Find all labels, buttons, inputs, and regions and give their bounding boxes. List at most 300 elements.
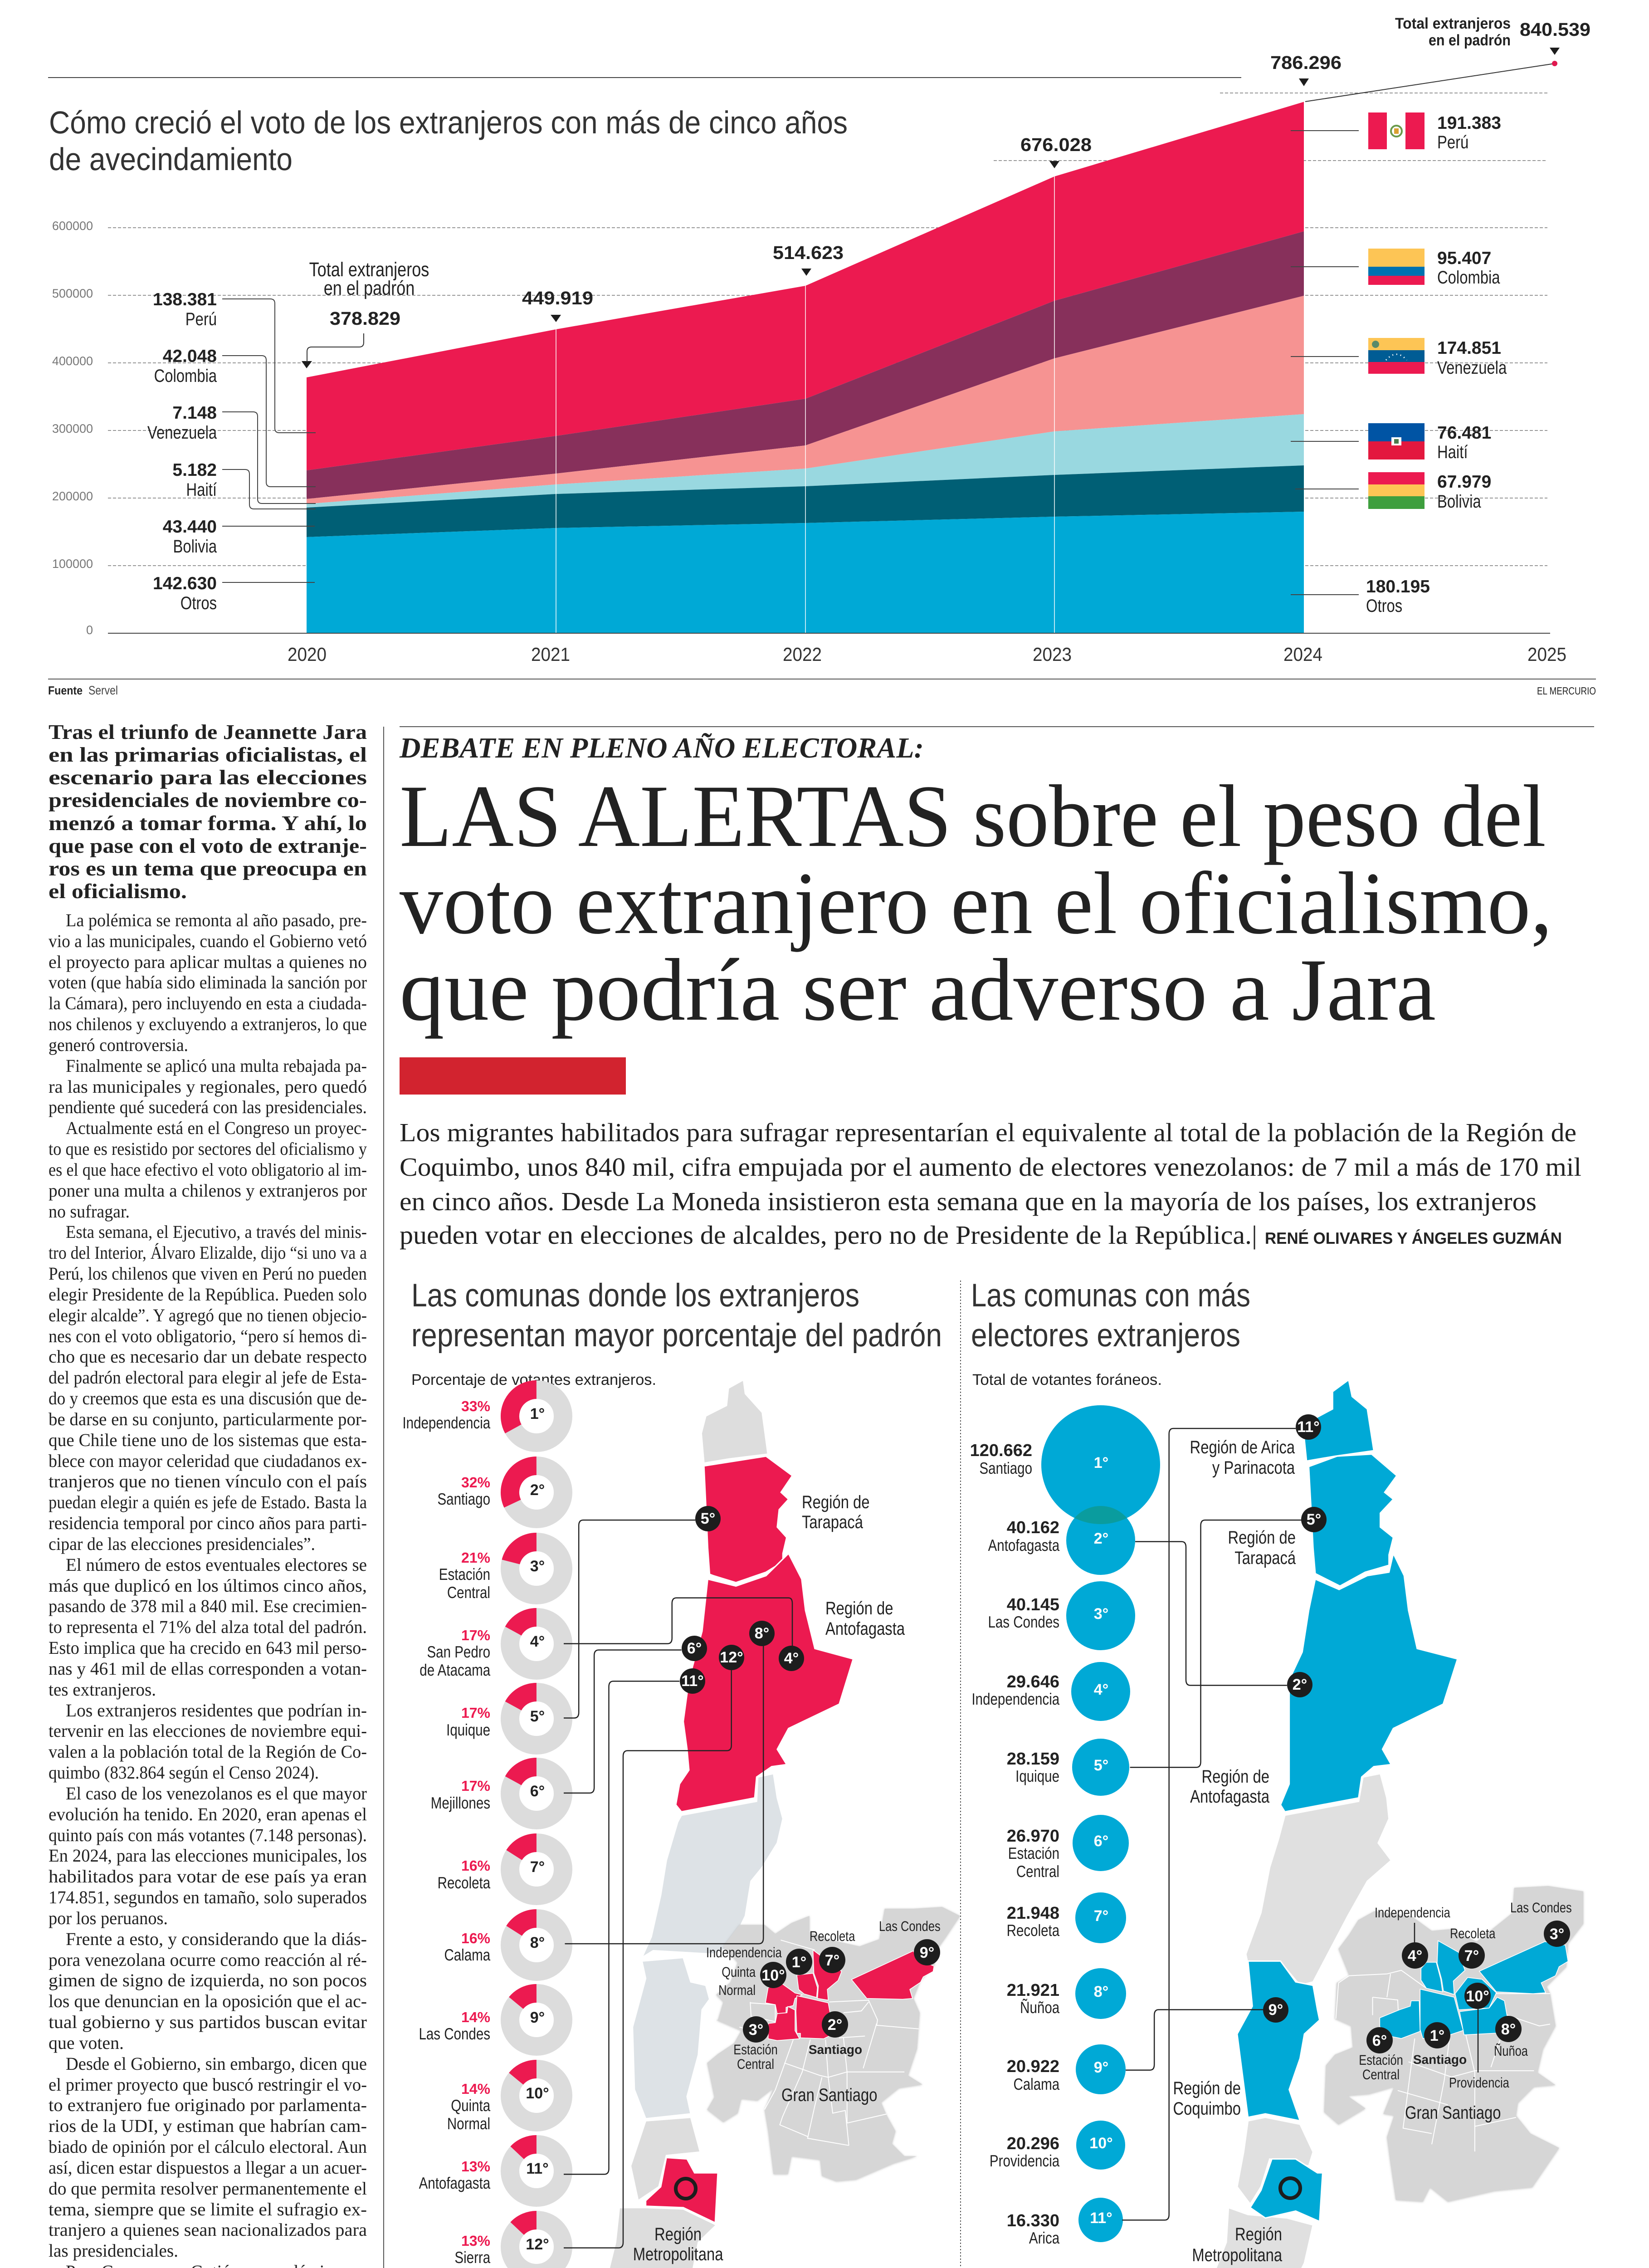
bubble labels: Independencia — [971, 1690, 1060, 1708]
map labels left: Región de — [825, 1598, 893, 1618]
commune labels: 21% — [461, 1549, 490, 1566]
main headline: voto extranjero en el oficialismo, — [400, 854, 1552, 953]
intro paragraph: presidenciales de noviembre co- — [49, 788, 367, 811]
donuts: percentage by commune: 5° — [530, 1708, 545, 1725]
panel heading: Total de votantes foráneos. — [972, 1371, 1162, 1388]
body text: left column: cho que es necesario dar un debate respecto — [49, 1346, 367, 1367]
main headline: que podría ser adverso a Jara — [400, 941, 1436, 1039]
bubble ranks: 8° — [1094, 1983, 1108, 2000]
map labels left: Región — [654, 2224, 702, 2244]
body text: left column: tervenir en las elecciones de noviembre equi- — [49, 1721, 367, 1741]
map labels left: Antofagasta — [825, 1619, 905, 1639]
map markers left: 3° — [749, 2021, 763, 2038]
commune labels: Quinta — [451, 2096, 491, 2115]
body text: left column: nos chilenos y excluyendo a extranjeros, lo que — [49, 1014, 367, 1034]
icon: flag Peru — [1368, 112, 1425, 149]
right legend 2024 with flags — [1291, 112, 1507, 616]
bubble ranks — [1089, 1454, 1113, 2227]
bubble labels: 21.921 — [1007, 1981, 1059, 2000]
body text: left column: 174.851, segundos en tamaño, solo superados — [49, 1887, 367, 1907]
map of Chile, blue regions — [1211, 1380, 1458, 2268]
body text: left column: Finalmente se aplicó una multa rebajada pa- — [66, 1056, 367, 1076]
map markers left: 1° — [792, 1954, 806, 1971]
panel heading: Porcentaje de votantes extranjeros. — [411, 1371, 656, 1388]
map labels left: Estación — [733, 2042, 778, 2058]
commune labels: Independencia — [402, 1413, 491, 1432]
body text: left column: tranjero a quienes sean nacionalizados para — [49, 2219, 367, 2240]
map markers left: 12° — [720, 1649, 743, 1666]
body text: left column: El número de estos eventuales electores se — [66, 1554, 367, 1575]
map markers right: 10° — [1466, 1988, 1489, 2005]
commune labels: 14% — [461, 2081, 490, 2097]
bubble ranks: 10° — [1089, 2135, 1113, 2152]
bubble labels: 28.159 — [1007, 1750, 1059, 1769]
body text: left column: que Chile tiene uno de los sistemas que esta- — [49, 1430, 367, 1450]
intro paragraph: escenario para las elecciones — [49, 766, 367, 789]
map labels right: Coquimbo — [1173, 2099, 1241, 2119]
left legend 2020: 42.048 — [163, 347, 217, 366]
bubble labels: 120.662 — [970, 1441, 1032, 1460]
left legend 2020: 142.630 — [153, 574, 217, 593]
y axis labels: 100000 — [52, 557, 93, 571]
bubble labels: 40.145 — [1007, 1595, 1059, 1614]
leader lines — [1122, 1428, 1302, 2220]
body text: left column: habilitados para votar de ese país ya eran — [49, 1866, 367, 1887]
left legend 2020 — [147, 290, 316, 613]
bubble ranks: 4° — [1094, 1681, 1108, 1698]
body text: left column: nas y 461 mil de ellas corresponden a votan- — [49, 1658, 367, 1679]
y axis labels: 500000 — [52, 287, 93, 300]
kicker: DEBATE EN PLENO AÑO ELECTORAL: — [399, 732, 924, 764]
map markers left — [680, 1506, 940, 2043]
left legend 2020: Perú — [185, 309, 217, 329]
body text: left column: quimbo (832.864 según el Censo 2024). — [49, 1762, 319, 1783]
body text: left column: evolución ha tenido. En 2020, eran apenas el — [49, 1804, 367, 1824]
y axis labels: 400000 — [52, 354, 93, 368]
map markers right: 6° — [1372, 2032, 1387, 2049]
total values: 786.296 — [1270, 52, 1342, 73]
body text: left column: la Cámara), pero incluyendo en esta a ciudada- — [49, 993, 367, 1013]
map labels right: Estación — [1359, 2052, 1403, 2068]
x axis years: 2021 — [531, 644, 570, 665]
intro paragraph: menzó a tomar forma. Y ahí, lo — [49, 811, 367, 835]
deck: pueden votar en elecciones de alcaldes, pero no de Presidente de la República.| — [400, 1220, 1257, 1250]
donuts: percentage by commune: 6° — [530, 1783, 545, 1800]
total values: 449.919 — [522, 288, 593, 308]
intro paragraph: el oficialismo. — [49, 880, 187, 903]
map labels left: Central — [737, 2056, 774, 2072]
body text: left column: Los extranjeros residentes que podrían in- — [66, 1700, 367, 1721]
bubble labels: 20.296 — [1007, 2134, 1059, 2153]
icon: Santiago ring — [676, 2179, 696, 2199]
map markers right — [1263, 1414, 1570, 2053]
body text: left column: be darse en su conjunto, particularmente por- — [49, 1409, 367, 1429]
body text: left column: que voten. — [49, 2033, 124, 2053]
body text: left column: Actualmente está en el Congreso un proyec- — [66, 1118, 367, 1138]
body text: left column: pasando de 378 mil a 840 mil. Ese crecimien- — [49, 1596, 367, 1616]
map markers right: 8° — [1501, 2021, 1516, 2038]
map labels left — [633, 1492, 941, 2264]
bubble ranks: 6° — [1094, 1833, 1108, 1850]
commune labels: Estación — [439, 1565, 490, 1584]
map markers right: 7° — [1464, 1947, 1479, 1965]
commune labels: 16% — [461, 1930, 490, 1946]
commune labels: 17% — [461, 1778, 490, 1794]
map labels right: Gran Santiago — [1405, 2103, 1501, 2123]
commune labels: de Atacama — [420, 1661, 491, 1679]
right legend 2024 with flags: Venezuela — [1437, 358, 1507, 378]
total values — [330, 19, 1590, 329]
body text: left column: La polémica se remonta al año pasado, pre- — [66, 910, 367, 930]
body text: left column: elegir alcalde”. Y agregó que no tienen objecio- — [49, 1305, 367, 1325]
right legend 2024 with flags: Haití — [1437, 442, 1468, 462]
right legend 2024 with flags: 95.407 — [1437, 249, 1491, 268]
body text: left column: tual gobierno y sus partidos buscan evitar — [49, 2012, 367, 2032]
x axis years: 2024 — [1283, 644, 1322, 665]
left legend 2020: Haití — [186, 480, 217, 500]
body text: left column: tro del Interior, Álvaro Elizalde, dijo “si uno va a — [49, 1242, 367, 1263]
caption: total 2020 — [307, 259, 429, 362]
body text: left column: Esta semana, el Ejecutivo, a través del minis- — [66, 1222, 367, 1242]
body text: left column: así, dicen estar dispuestos a llegar a un acuer- — [49, 2157, 367, 2178]
left legend 2020: Bolivia — [173, 537, 217, 557]
caption: total 2025: en el padrón — [1429, 32, 1511, 49]
x axis years: 2023 — [1033, 644, 1072, 665]
commune labels: Iquique — [446, 1721, 490, 1739]
map markers left: 8° — [755, 1625, 769, 1642]
body text: left column: En 2024, para las elecciones municipales, los — [49, 1845, 367, 1866]
body text: left column: pendiente qué sucederá con las presidenciales. — [49, 1097, 367, 1117]
leader lines — [564, 1520, 792, 2248]
panel: area chart of foreign voters — [48, 15, 1596, 697]
bubble labels: Las Condes — [988, 1613, 1059, 1631]
intro paragraph: Tras el triunfo de Jeannette Jara — [49, 720, 367, 743]
body text: left column: blece con mayor celeridad que ciudadanos ex- — [49, 1451, 367, 1471]
bubble ranks: 2° — [1094, 1530, 1108, 1547]
map labels right: Antofagasta — [1190, 1787, 1270, 1807]
body text: left column: gimen de signo de izquierda, no son pocos — [49, 1970, 367, 1990]
deck: Los migrantes habilitados para sufragar representarían el equivalente al total de la población de la Región de — [400, 1118, 1576, 1147]
chart source — [48, 684, 118, 697]
donuts: percentage by commune: 4° — [530, 1633, 545, 1650]
deck — [400, 1118, 1581, 1250]
commune labels: Central — [447, 1583, 490, 1602]
bubble ranks: 3° — [1094, 1605, 1108, 1623]
total values: 514.623 — [773, 242, 844, 263]
right legend 2024 with flags: Otros — [1366, 596, 1402, 616]
bubble labels: 29.646 — [1007, 1672, 1059, 1691]
donuts: percentage by commune: 12° — [526, 2236, 549, 2253]
y axis labels: 0 — [86, 623, 93, 637]
map of northern Chile, pink regions — [606, 1380, 853, 2268]
map markers right: 3° — [1550, 1926, 1564, 1943]
bubble labels: Calama — [1013, 2075, 1060, 2093]
bubble labels: Estación — [1008, 1844, 1059, 1862]
panel heading: electores extranjeros — [971, 1317, 1240, 1354]
body text: left column: quinto país con más votantes (7.148 personas). — [49, 1825, 367, 1845]
body text: left column: rios de la UDI, y estiman que habrían cam- — [49, 2116, 367, 2136]
map labels right: y Parinacota — [1212, 1458, 1295, 1478]
commune labels: 33% — [461, 1398, 490, 1414]
y axis labels: 600000 — [52, 219, 93, 233]
right legend 2024 with flags: 174.851 — [1437, 338, 1501, 358]
map markers left: 5° — [701, 1510, 715, 1527]
map labels left: Tarapacá — [802, 1512, 864, 1532]
right legend 2024 with flags: 67.979 — [1437, 472, 1491, 492]
map labels right: Región — [1235, 2224, 1282, 2244]
commune labels: 16% — [461, 1857, 490, 1874]
donuts: percentage by commune: 1° — [530, 1405, 545, 1422]
commune labels: Recoleta — [438, 1873, 491, 1892]
commune labels: 14% — [461, 2009, 490, 2025]
map labels right: Recoleta — [1450, 1926, 1496, 1941]
body text: left column: biado de opinión por el cálculo electoral. Aun — [49, 2136, 367, 2157]
chart title: Cómo creció el voto de los extranjeros con más de cinco años — [49, 105, 848, 140]
icon: flag Bolivia — [1368, 472, 1425, 509]
body text: left column: vio a las municipales, cuando el Gobierno vetó — [49, 931, 367, 951]
chart source: Fuente — [48, 684, 83, 697]
body text: left column: residencia temporal por cinco años para parti- — [49, 1513, 367, 1533]
body text: left column: el primer proyecto que buscó restringir el vo- — [49, 2074, 367, 2095]
map labels right: Región de Arica — [1190, 1437, 1295, 1457]
intro paragraph — [49, 720, 367, 903]
y axis labels: 300000 — [52, 422, 93, 435]
projection line to 2025 — [1305, 61, 1557, 102]
map labels right: Ñuñoa — [1494, 2043, 1528, 2059]
icon: flag Colombia — [1368, 249, 1425, 285]
map labels right: Región de — [1173, 2078, 1241, 2098]
donuts: percentage by commune: 11° — [526, 2160, 549, 2177]
map markers left: 4° — [784, 1650, 799, 1667]
caption: total 2020: Total extranjeros — [309, 259, 429, 281]
body text: left column: nes con el voto obligatorio, “pero sí hemos di- — [49, 1326, 367, 1346]
bubble ranks: 1° — [1094, 1454, 1108, 1471]
map markers left: 2° — [828, 2016, 842, 2033]
body text: left column: del padrón electoral para elegir al jefe de Esta- — [49, 1367, 367, 1388]
commune labels: Santiago — [437, 1490, 490, 1508]
left legend 2020: 5.182 — [172, 460, 217, 480]
total markers — [302, 48, 1560, 368]
body text: left column: poner una multa a chilenos y extranjeros por — [49, 1180, 367, 1201]
bubble labels: 20.922 — [1007, 2057, 1059, 2076]
map markers right: 4° — [1408, 1947, 1422, 1965]
body text: left column: El caso de los venezolanos es el que mayor — [66, 1783, 367, 1804]
deck: RENÉ OLIVARES Y ÁNGELES GUZMÁN — [1265, 1229, 1562, 1247]
body text: left column: Esto implica que ha crecido en 643 mil perso- — [49, 1637, 367, 1658]
map labels left: Recoleta — [810, 1928, 855, 1944]
inset map: Gran Santiago — [1324, 1886, 1583, 2202]
body text: left column: to representa el 71% del alza total del padrón. — [49, 1617, 367, 1637]
body text: left column: Perú, los chilenos que viven en Perú no pueden — [49, 1263, 367, 1284]
body text: left column: cipar de las elecciones presidenciales”. — [49, 1534, 315, 1554]
body text: left column: generó controversia. — [49, 1035, 188, 1055]
body text: left column: ra las municipales y regionales, pero quedó — [49, 1076, 367, 1097]
panel heading: representan mayor porcentaje del padrón — [411, 1317, 942, 1354]
body text: left column: to que es resistido por sectores del oficialismo y — [49, 1139, 367, 1159]
right legend 2024 with flags: 76.481 — [1437, 423, 1491, 443]
body text: left column — [49, 910, 367, 2268]
donuts: percentage by commune: 10° — [526, 2085, 549, 2102]
chart source: Servel — [88, 684, 118, 697]
map labels right — [1173, 1437, 1572, 2265]
map labels left: Metropolitana — [633, 2244, 723, 2264]
x axis years: 2022 — [783, 644, 822, 665]
commune labels: San Pedro — [427, 1642, 490, 1661]
bubble labels: 26.970 — [1007, 1827, 1059, 1846]
body text: left column: Desde el Gobierno, sin embargo, dicen que — [66, 2053, 367, 2074]
body text: left column: elegir Presidente de la República. Pueden solo — [49, 1284, 367, 1305]
panel: communes with most foreign voters — [970, 1277, 1583, 2268]
x axis years — [288, 644, 1566, 665]
map labels right: Independencia — [1375, 1905, 1450, 1921]
deck: Coquimbo, unos 840 mil, cifra empujada por el aumento de electores venezolanos: de 7 mil a más de 170 mil — [400, 1152, 1581, 1182]
total values: 840.539 — [1520, 19, 1590, 40]
map labels right: Región de — [1228, 1528, 1296, 1548]
map labels right: Metropolitana — [1192, 2245, 1283, 2265]
body text: left column: los que denuncian en la oposición que el ac- — [49, 1991, 367, 2011]
map markers left: 10° — [761, 1967, 785, 1984]
left legend 2020: Colombia — [154, 366, 217, 386]
body text: left column: por los peruanos. — [49, 1908, 168, 1928]
x axis years: 2020 — [288, 644, 327, 665]
body text: left column: voten (que había sido eliminada la sanción por — [49, 972, 367, 992]
body text: left column: valen a la población total de la Región de Co- — [49, 1741, 367, 1762]
red block — [400, 1057, 626, 1095]
x axis years: 2025 — [1527, 644, 1566, 665]
body text: left column: tema, siempre que se limite el sufragio ex- — [49, 2199, 367, 2219]
map labels left: Región de — [802, 1492, 870, 1512]
body text: left column: do que permita resolver permanentemente el — [49, 2178, 367, 2199]
body text: left column: to extranjero fue originado por parlamenta- — [49, 2095, 367, 2115]
commune labels: Antofagasta — [419, 2174, 491, 2192]
body text: left column: tranjeros que no tienen vínculo con el país — [49, 1471, 367, 1491]
panel: communes with highest foreign share — [402, 1277, 960, 2268]
body text: left column: es el que hace efectivo el voto obligatorio al im- — [49, 1159, 367, 1180]
intro paragraph: que pase con el voto de extranje- — [49, 834, 367, 857]
commune labels — [402, 1398, 491, 2268]
body text: left column: puedan elegir a quién es jefe de Estado. Basta la — [49, 1492, 367, 1512]
y axis labels: 200000 — [52, 489, 93, 503]
right legend 2024 with flags: 191.383 — [1437, 113, 1501, 133]
intro paragraph: en las primarias oficialistas, el — [49, 743, 367, 766]
commune labels: 32% — [461, 1474, 490, 1491]
total values: 378.829 — [330, 308, 400, 329]
donuts: percentage by commune: 7° — [530, 1858, 545, 1876]
inset map: Gran Santiago — [707, 1907, 960, 2181]
map markers right: 1° — [1430, 2027, 1444, 2044]
main headline: LAS ALERTAS sobre el peso del — [400, 767, 1546, 865]
right legend 2024 with flags: Colombia — [1437, 268, 1500, 288]
body text: left column: las presidenciales. — [49, 2240, 178, 2261]
body text: left column: tes extranjeros. — [49, 1679, 156, 1700]
bubble labels: Central — [1016, 1862, 1059, 1881]
bubble labels: Ñuñoa — [1020, 1998, 1060, 2017]
bubble labels: Iquique — [1015, 1767, 1059, 1785]
right legend 2024 with flags: Bolivia — [1437, 492, 1481, 512]
map labels right: Tarapacá — [1234, 1548, 1296, 1568]
commune labels: Sierra — [454, 2248, 491, 2267]
map markers right: 9° — [1268, 2001, 1283, 2019]
map labels right: Región de — [1201, 1767, 1269, 1787]
commune labels: Mejillones — [431, 1794, 490, 1812]
map labels left: Santiago — [809, 2043, 862, 2057]
bubble ranks: 11° — [1090, 2209, 1112, 2227]
commune labels: Normal — [447, 2114, 490, 2133]
map markers right: 5° — [1307, 1511, 1321, 1528]
caption: total 2020: en el padrón — [324, 277, 415, 299]
bubble labels: Providencia — [990, 2151, 1060, 2170]
y axis labels — [52, 219, 93, 637]
credit: EL MERCURIO — [1537, 685, 1596, 697]
bubbles: foreign voters by commune — [1041, 1405, 1160, 2242]
deck: en cinco años. Desde La Moneda insistieron esta semana que en la mayoría de los países, los extranjeros — [400, 1187, 1537, 1216]
panel heading: Las comunas con más — [971, 1277, 1250, 1314]
donuts: percentage by commune: 2° — [530, 1481, 545, 1499]
map markers right: 11° — [1297, 1418, 1320, 1436]
icon: flag Haiti — [1368, 423, 1425, 459]
stacked areas — [307, 102, 1304, 633]
main headline — [400, 767, 1552, 1039]
intro paragraph: ros es un tema que preocupa en — [49, 857, 367, 880]
left legend 2020: Venezuela — [147, 423, 217, 443]
caption: total 2025 — [1395, 15, 1511, 49]
bubble labels: Santiago — [979, 1459, 1032, 1477]
map labels right: Central — [1362, 2067, 1400, 2082]
donuts: percentage by commune: 3° — [530, 1558, 545, 1575]
bubble ranks: 7° — [1094, 1907, 1108, 1925]
body text: left column: do y creemos que esta es una discusión que de- — [49, 1388, 367, 1408]
map markers left: 6° — [687, 1640, 702, 1657]
icon: flag Venezuela — [1368, 338, 1425, 374]
map markers left: 9° — [920, 1944, 934, 1961]
body text: left column: no sufragar. — [49, 1201, 130, 1222]
panel heading: Las comunas donde los extranjeros — [411, 1277, 859, 1314]
right legend 2024 with flags: 180.195 — [1366, 577, 1430, 596]
commune labels: 17% — [461, 1627, 490, 1643]
chart title: de avecindamiento — [49, 142, 293, 177]
donuts: percentage by commune: 8° — [530, 1934, 545, 1951]
commune labels: 13% — [461, 2233, 490, 2249]
panel heading — [971, 1277, 1250, 1388]
body text: left column: Frente a esto, y considerando que la diás- — [66, 1929, 367, 1949]
commune labels: Calama — [444, 1945, 491, 1964]
left legend 2020: 138.381 — [153, 290, 217, 309]
bubble labels: Arica — [1029, 2229, 1060, 2247]
donuts: percentage by commune: 9° — [530, 2009, 545, 2026]
right legend 2024 with flags: Perú — [1437, 132, 1468, 152]
map labels left: Normal — [718, 1982, 756, 1998]
commune labels: 17% — [461, 1705, 490, 1721]
commune labels: 13% — [461, 2158, 490, 2175]
map labels left: Las Condes — [879, 1918, 941, 1934]
bubble labels: Antofagasta — [988, 1536, 1060, 1554]
map labels left: Quinta — [722, 1964, 756, 1980]
left legend 2020: 43.440 — [163, 517, 217, 537]
donuts: percentage by commune — [499, 1380, 574, 2268]
body text: left column: pora venezolana ocurre como reacción al ré- — [49, 1950, 367, 1970]
map markers left: 7° — [825, 1952, 839, 1969]
map labels right: Las Condes — [1510, 1900, 1572, 1916]
caption: total 2025: Total extranjeros — [1395, 15, 1511, 32]
map labels right: Providencia — [1449, 2075, 1509, 2091]
total values: 676.028 — [1020, 134, 1092, 155]
panel heading — [411, 1277, 942, 1388]
body text: left column: más que duplicó en los últimos cinco años, — [49, 1575, 367, 1596]
body text: left column: el proyecto para aplicar multas a quienes no — [49, 952, 367, 972]
map labels right: Santiago — [1413, 2053, 1467, 2067]
bubble labels: 40.162 — [1007, 1518, 1059, 1537]
bubble labels: 16.330 — [1007, 2211, 1059, 2230]
